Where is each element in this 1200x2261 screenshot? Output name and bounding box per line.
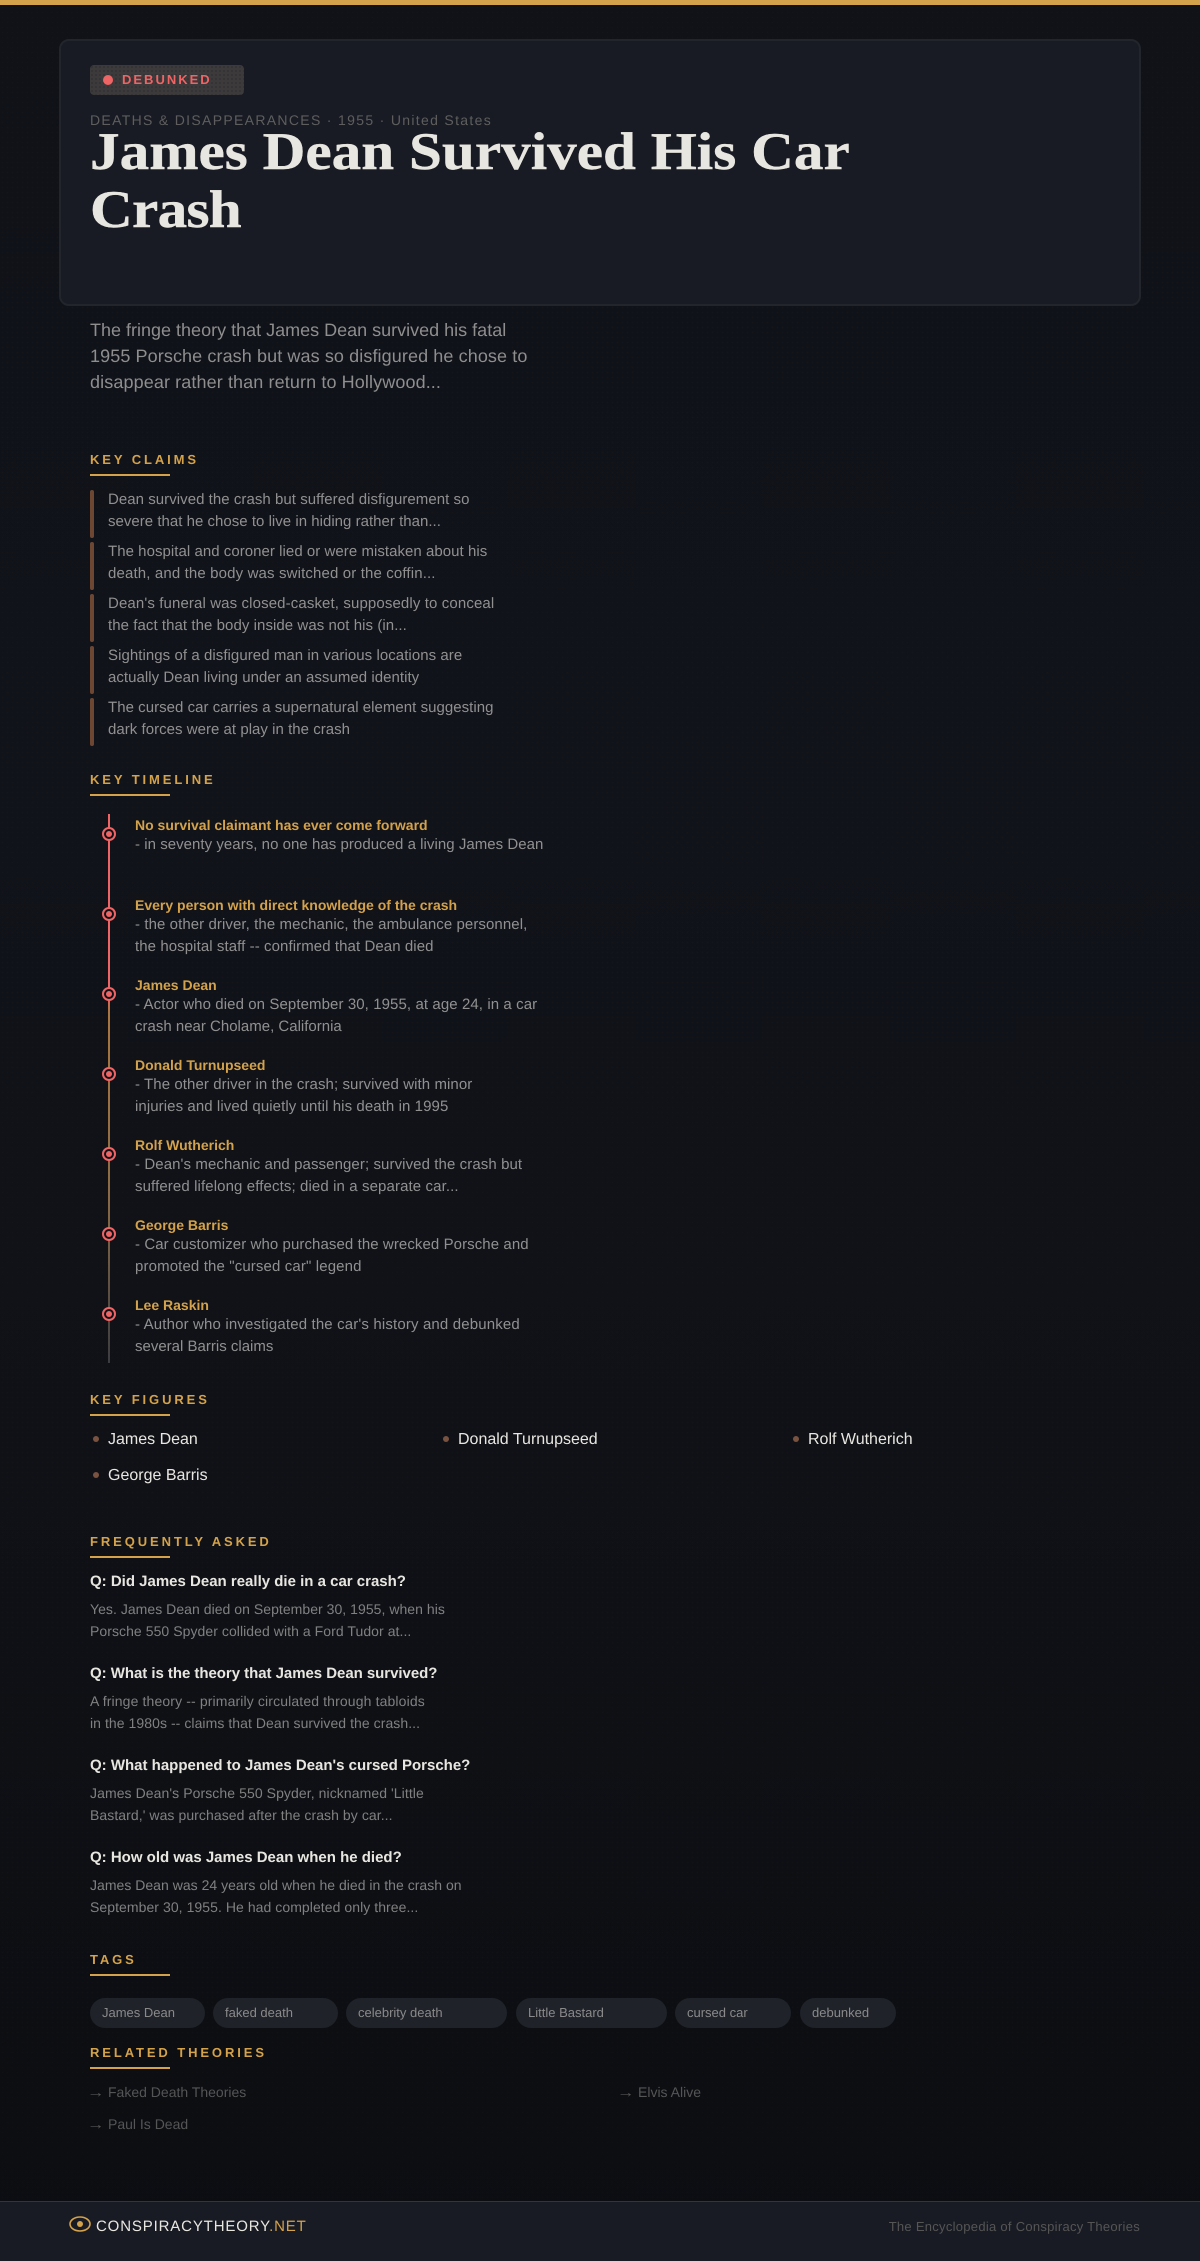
related: Faked Death Theories: Faked Death Theories: [108, 2084, 246, 2100]
intro text: disappear rather than return to Hollywood...: [90, 372, 441, 392]
faq list: [90, 1573, 470, 1915]
tag: James Dean: [90, 1998, 205, 2028]
entry 4 title: Donald Turnupseed: [135, 1057, 265, 1073]
intro text: [90, 320, 527, 392]
entry 2 text: - the other driver, the mechanic, the ambulance personnel,: [135, 916, 527, 933]
title: Crash: [90, 181, 241, 239]
figure: James Dean: James Dean: [108, 1431, 198, 1448]
tag: Little Bastard: [516, 1998, 667, 2028]
heading: key figures: KEY FIGURES: [90, 1392, 210, 1407]
claim bar 2: [90, 542, 94, 590]
entry 7 text line 2: several Barris claims: [135, 1338, 273, 1355]
heading: tags: TAGS: [90, 1952, 137, 1967]
icon: eye logo: [69, 2216, 91, 2232]
question 4: Q: How old was James Dean when he died?: [90, 1849, 402, 1866]
answer 1: Yes. James Dean died on September 30, 1955, when his: [90, 1601, 445, 1617]
answer 4: James Dean was 24 years old when he died in the crash on: [90, 1877, 462, 1893]
tag: faked death: [213, 1998, 338, 2028]
entry 3 text line 2: crash near Cholame, California: [135, 1018, 342, 1035]
timeline chart: [102, 814, 116, 1363]
claim 2: The hospital and coroner lied or were mistaken about his: [108, 543, 487, 560]
entry 3 text: - Actor who died on September 30, 1955, at age 24, in a car: [135, 996, 537, 1013]
panel: header: [59, 39, 1141, 306]
entry 6 text: - Car customizer who purchased the wrecked Porsche and: [135, 1236, 529, 1253]
entry 1 text: - in seventy years, no one has produced a living James Dean: [135, 836, 543, 853]
question 3: Q: What happened to James Dean's cursed Porsche?: [90, 1757, 470, 1774]
tag: celebrity death: [346, 1998, 507, 2028]
entry 2 text line 2: the hospital staff -- confirmed that Dean died: [135, 938, 434, 955]
tag: debunked: debunked: [812, 2005, 869, 2020]
tag: celebrity death: celebrity death: [358, 2005, 443, 2020]
title: James Dean Survived His Car: [90, 123, 850, 181]
tag: cursed car: cursed car: [687, 2005, 748, 2020]
tag: debunked: [800, 1998, 896, 2028]
bullet: [93, 1472, 99, 1478]
figure: Rolf Wutherich: Rolf Wutherich: [808, 1431, 913, 1448]
related: Paul Is Dead: →: [87, 2116, 104, 2132]
entry 7 text: - Author who investigated the car's history and debunked: [135, 1316, 520, 1333]
answer 4 line 2: September 30, 1955. He had completed only three...: [90, 1899, 418, 1915]
question 2: Q: What is the theory that James Dean survived?: [90, 1665, 437, 1682]
tag: James Dean: James Dean: [102, 2005, 175, 2020]
category and date line: DEATHS & DISAPPEARANCES · 1955 · United States: [90, 112, 492, 128]
answer 2: A fringe theory -- primarily circulated through tabloids: [90, 1693, 425, 1709]
badge dot: [103, 75, 113, 85]
entry 6 title: George Barris: [135, 1217, 228, 1233]
footer tagline: The Encyclopedia of Conspiracy Theories: [889, 2219, 1140, 2234]
claim 2 line 2: death, and the body was switched or the coffin...: [108, 565, 436, 582]
entry 7 title: Lee Raskin: [135, 1297, 209, 1313]
figure: George Barris: George Barris: [108, 1467, 208, 1484]
intro text: 1955 Porsche crash but was so disfigured he chose to: [90, 346, 527, 366]
heading: key claims: KEY CLAIMS: [90, 452, 199, 467]
entry 4 text: - The other driver in the crash; survived with minor: [135, 1076, 472, 1093]
entry 4 text line 2: injuries and lived quietly until his death in 1995: [135, 1098, 448, 1115]
bullet: [93, 1436, 99, 1442]
claim 3: Dean's funeral was closed-casket, supposedly to conceal: [108, 595, 494, 612]
bullet: [443, 1436, 449, 1442]
answer 2 line 2: in the 1980s -- claims that Dean survived the crash...: [90, 1715, 420, 1731]
related: Faked Death Theories: →: [87, 2084, 104, 2100]
related: Elvis Alive: →: [617, 2084, 634, 2100]
claim 1 line 2: severe that he chose to live in hiding rather than...: [108, 513, 441, 530]
question 1: Q: Did James Dean really die in a car crash?: [90, 1573, 406, 1590]
related: Paul Is Dead: Paul Is Dead: [108, 2116, 188, 2132]
tag: Little Bastard: Little Bastard: [528, 2005, 604, 2020]
badge: debunked: [90, 65, 244, 95]
heading: related theories: RELATED THEORIES: [90, 2045, 267, 2060]
top accent bar: [0, 0, 1200, 5]
tag: faked death: faked death: [225, 2005, 293, 2020]
entry 3 title: James Dean: [135, 977, 217, 993]
entry 1 title: No survival claimant has ever come forward: [135, 817, 428, 833]
entry 2 title: Every person with direct knowledge of the crash: [135, 897, 457, 913]
claim bar 4: [90, 646, 94, 694]
claim 1: Dean survived the crash but suffered disfigurement so: [108, 491, 469, 508]
bullet: [793, 1436, 799, 1442]
claim bar 5: [90, 698, 94, 746]
key figures list: [93, 1431, 913, 1484]
claim 3 line 2: the fact that the body inside was not his (in...: [108, 617, 407, 634]
heading: key timeline: KEY TIMELINE: [90, 772, 216, 787]
figure: Donald Turnupseed: Donald Turnupseed: [458, 1431, 598, 1448]
entry 5 text line 2: suffered lifelong effects; died in a separate car...: [135, 1178, 459, 1195]
tag: cursed car: [675, 1998, 791, 2028]
claim bar 3: [90, 594, 94, 642]
claim 4 line 2: actually Dean living under an assumed identity: [108, 669, 419, 686]
title: [90, 123, 850, 239]
footer: [0, 2201, 1200, 2261]
timeline entries: [135, 817, 543, 1355]
entry 6 text line 2: promoted the "cursed car" legend: [135, 1258, 362, 1275]
answer 1 line 2: Porsche 550 Spyder collided with a Ford Tudor at...: [90, 1623, 411, 1639]
claim bar 1: [90, 490, 94, 538]
answer 3: James Dean's Porsche 550 Spyder, nicknamed 'Little: [90, 1785, 424, 1801]
entry 5 text: - Dean's mechanic and passenger; survived the crash but: [135, 1156, 522, 1173]
brand name: CONSPIRACYTHEORY.NET: [96, 2218, 307, 2235]
answer 3 line 2: Bastard,' was purchased after the crash by car...: [90, 1807, 393, 1823]
claim 5 line 2: dark forces were at play in the crash: [108, 721, 350, 738]
badge label: DEBUNKED: [122, 72, 212, 87]
entry 5 title: Rolf Wutherich: [135, 1137, 234, 1153]
related: Elvis Alive: Elvis Alive: [638, 2084, 701, 2100]
claim 5: The cursed car carries a supernatural element suggesting: [108, 699, 494, 716]
panel: key claims: [90, 490, 494, 746]
claim 4: Sightings of a disfigured man in various locations are: [108, 647, 462, 664]
heading: frequently asked: FREQUENTLY ASKED: [90, 1534, 272, 1549]
intro text: The fringe theory that James Dean survived his fatal: [90, 320, 506, 340]
